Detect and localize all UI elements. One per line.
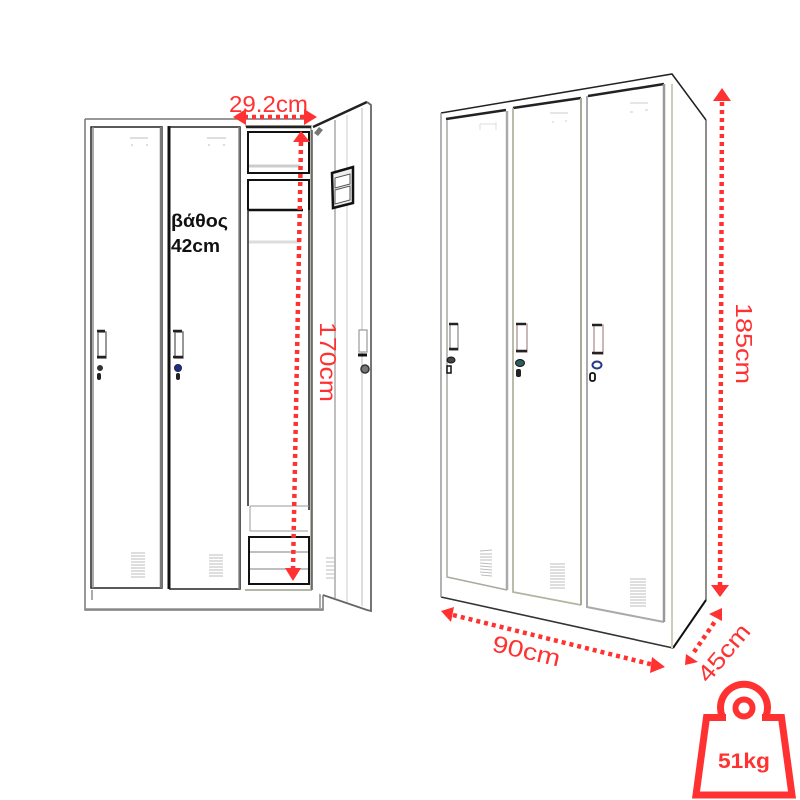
label: depth 42cm xyxy=(171,211,228,256)
open door xyxy=(312,102,371,611)
card holder xyxy=(332,167,353,208)
dimension: width 29.2cm xyxy=(229,91,317,125)
left door handle and lock xyxy=(97,331,106,380)
dimension: width 90cm xyxy=(441,607,665,673)
dimension: height 185cm xyxy=(711,88,757,597)
left door xyxy=(91,127,162,588)
plinth inner line xyxy=(85,590,323,609)
outer edges xyxy=(441,74,706,648)
dimension: depth 45cm: 45cm xyxy=(692,618,756,687)
icon: weight 51kg: 51kg xyxy=(718,750,770,773)
illustration: closed three-door locker xyxy=(441,74,706,648)
locker body xyxy=(441,74,706,648)
illustration: open two-door locker xyxy=(85,102,371,611)
label: depth 42cm: 42cm xyxy=(171,236,220,256)
door hinge xyxy=(314,127,323,136)
middle door xyxy=(169,126,240,589)
door three xyxy=(587,84,664,622)
middle door handle and lock xyxy=(173,331,183,380)
dimension: inner height 170cm: 170cm xyxy=(315,322,341,402)
dimension: width 90cm: 90cm xyxy=(490,631,563,671)
top black gaps xyxy=(446,84,664,119)
locker body outline xyxy=(85,119,323,610)
icon: weight 51kg xyxy=(696,684,792,795)
dimension: depth 45cm xyxy=(685,608,756,687)
door one xyxy=(447,111,507,590)
open door handle and lock xyxy=(359,330,367,352)
door one handle and lock xyxy=(447,324,458,373)
door two handle and lock xyxy=(516,324,527,377)
door three handle and lock xyxy=(590,325,603,381)
label: depth 42cm: βάθος xyxy=(171,211,228,231)
dimension: height 185cm: 185cm xyxy=(731,303,757,384)
interior compartment xyxy=(245,126,311,590)
dimension: inner height 170cm xyxy=(285,131,341,581)
door two xyxy=(513,98,581,605)
dimension: width 29.2cm: 29.2cm xyxy=(229,91,308,117)
